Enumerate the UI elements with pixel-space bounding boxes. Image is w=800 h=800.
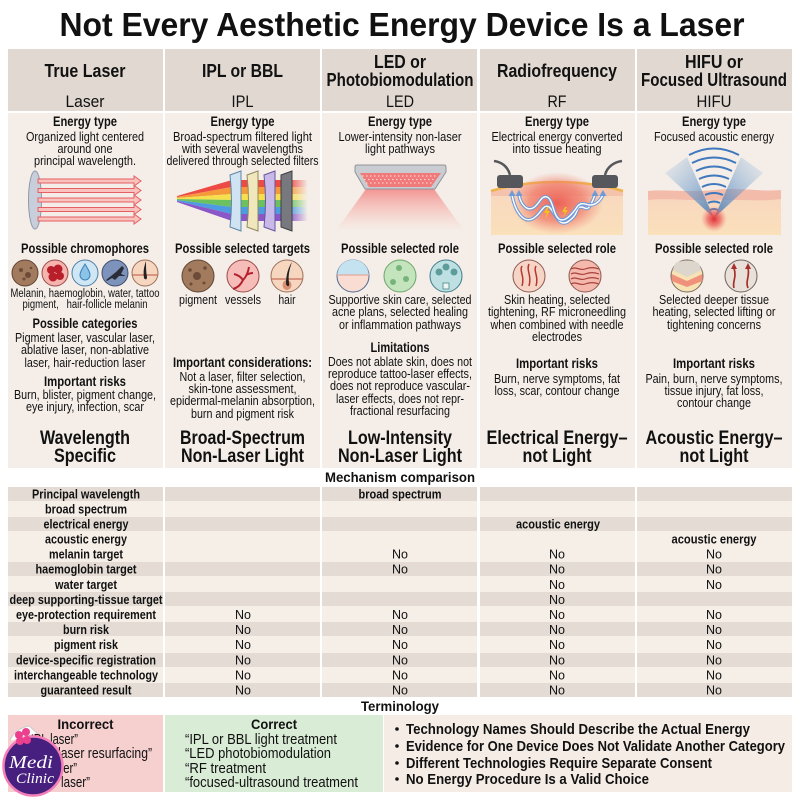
text: laser risks: eye injury, infection, scar [26,399,145,414]
footer: acoustic energy: not Light [680,446,749,467]
icon: water [72,260,98,286]
table row labels: water target [54,578,118,592]
table row labels: haemoglobin target [36,562,137,576]
panel: key messages [384,715,792,792]
text: possible categories: laser, hair-reduction laser [24,355,146,370]
text: HIFU risks [646,356,782,410]
text: HIFU role: Selected deeper tissue [659,292,769,307]
heading: terminology: Terminology [361,699,439,714]
text: HIFU energy type [654,114,774,144]
text: RF role: electrodes [532,329,582,344]
text: RF role: when combined with needle [490,317,624,332]
text: limitations [328,340,472,418]
heading: possible selected role (RF): Possible selected role [498,241,616,256]
text: HIFU risks: tissue injury, fat loss, [664,383,764,398]
text: laser energy type: principal wavelength. [34,153,136,168]
heading: possible chromophores: Possible chromophores [21,241,149,256]
table value cells: No [706,548,722,562]
header: LED or Photobiomodulation: LED or [374,52,426,72]
text: LED energy type [338,114,462,156]
text: IPL energy type: with several wavelengths [181,141,303,156]
table value cells: No [706,623,722,637]
text: RF energy type [492,114,622,156]
table value cells: No [549,638,565,652]
text: RF energy type: Electrical energy converted [492,129,622,144]
table row labels: melanin target [49,548,124,562]
header: IPL or BBL [165,49,320,111]
text: target labels: pigment [179,292,217,307]
text: HIFU role [652,292,776,332]
footer: broad-spectrum non-laser light [180,428,305,467]
text: LED energy type: Lower-intensity non-laser [338,129,462,144]
table value cells: acoustic energy [516,518,600,532]
text: laser risks: Burn, blister, pigment change, [14,387,156,402]
icon: melanin [12,260,38,286]
text: RF risks: loss, scar, contour change [494,383,620,398]
panel: incorrect terms [8,715,163,792]
panel: incorrect terms: “HIFU laser” [27,775,90,791]
icon: skin heating [513,260,545,292]
text: RF energy type: Energy type [525,114,589,129]
header: True Laser: True Laser [44,61,126,81]
table value cells: No [235,684,251,698]
illustration: filtered spectrum [177,171,308,231]
icon: acne [384,260,416,292]
table row labels: acoustic energy [45,532,127,546]
text: LED role: Supportive skin care, selected [328,292,472,307]
icon: lifting [725,260,757,292]
header: IPL or BBL: IPL [232,92,254,111]
text: IPL energy type [166,114,319,168]
text: HIFU risks: Important risks [673,356,755,371]
text: laser energy type: around one [58,141,112,156]
panel: correct terms: Correct [251,717,297,732]
icon: healing pathways [430,260,462,292]
table value cells: No [549,668,565,682]
table value cells: No [392,562,408,576]
table row labels: Principal wavelength [32,488,140,502]
text: RF role: tightening, RF microneedling [488,304,626,319]
text: important considerations: Not a laser, filter selection, [180,369,306,384]
table value cells: No [549,578,565,592]
table value cells [235,488,757,698]
panel: key messages: Technology Names Should Describe the Actual Energy [406,721,751,738]
table value cells: No [706,654,722,668]
panel: key messages: No Energy Procedure Is a Valid Choice [406,771,649,788]
logo: Medi Clinic badge: Medi [8,752,53,772]
panel: correct terms: “focused-ultrasound treatment [185,775,358,791]
logo: Medi Clinic badge: Clinic [16,771,54,787]
icon: vessels [227,260,259,292]
header: Radiofrequency: Radiofrequency [497,61,617,81]
text: chromophore list: pigment, hair-follicle melanin [22,299,148,311]
panel: HIFU column [637,49,792,468]
table value cells: No [235,623,251,637]
text: LED role: acne plans, selected healing [332,304,468,319]
icon: haemoglobin [42,260,68,286]
table value cells: No [706,578,722,592]
panel: correct terms: “LED photobiomodulation [185,746,331,762]
table row labels: eye-protection requirement [16,608,157,622]
panel: incorrect terms: “RF laser” [27,761,77,777]
footer: broad-spectrum non-laser light: Non-Laser Light [181,446,305,467]
footer: electrical energy: not Light [522,446,592,467]
heading: possible selected role (HIFU): Possible selected role [655,241,773,256]
panel: incorrect terms: Incorrect [58,717,114,732]
text: IPL energy type: delivered through selected filters [166,153,319,168]
text: LED energy type: Energy type [368,114,432,129]
text: RF energy type: into tissue heating [512,141,602,156]
text: RF risks: Important risks [516,356,598,371]
footer: low-intensity non-laser light: Non-Laser Light [338,446,463,467]
table value cells: No [392,608,408,622]
panel: LED column [322,49,477,468]
text: IPL energy type: Broad-spectrum filtered light [173,129,312,144]
text: limitations: laser effects, does not repr- [336,391,464,406]
table value cells: No [235,668,251,682]
header: Radiofrequency [480,49,635,111]
text: chromophore list [10,288,160,311]
header: HIFU or Focused Ultrasound: HIFU or [685,52,743,72]
text: HIFU energy type: Focused acoustic energy [654,129,774,144]
table row labels: guaranteed result [40,684,132,698]
table value cells: No [392,548,408,562]
footer: low-intensity non-laser light [338,428,463,467]
text: laser energy type [26,114,144,168]
text: IPL energy type: Energy type [210,114,275,129]
icon: hair [271,260,303,292]
text: possible categories: Possible categories [32,316,138,331]
text: important considerations [170,355,315,421]
table value cells: No [392,668,408,682]
text: RF role [488,292,626,344]
table value cells: broad spectrum [358,488,442,502]
table value cells: No [706,684,722,698]
footer: wavelength specific: Specific [54,446,116,467]
table value cells: No [392,623,408,637]
table row labels: device-specific registration [16,654,156,668]
text: possible categories [15,316,155,370]
footer: wavelength specific: Wavelength [40,428,130,449]
table value cells: No [706,562,722,576]
text: LED energy type: light pathways [365,141,435,156]
text: HIFU risks: contour change [677,395,751,410]
text: HIFU role: heating, selected lifting or [652,304,776,319]
panel: key messages: Different Technologies Require Separate Consent [406,755,712,772]
header: Radiofrequency: RF [548,92,566,111]
footer: low-intensity non-laser light: Low-Intensity [348,428,452,449]
table value cells: acoustic energy [672,532,757,546]
text: limitations: Does not ablate skin, does not [328,354,472,369]
table value cells: No [392,638,408,652]
panel: Radiofrequency column [480,49,635,468]
header: IPL or BBL: IPL or BBL [202,61,283,81]
table value cells: No [392,654,408,668]
footer: broad-spectrum non-laser light: Broad-Spectrum [180,428,305,449]
text: important considerations: burn and pigment risk [191,406,294,421]
text: laser energy type: Energy type [53,114,117,129]
text: RF role: Skin heating, selected [504,292,610,307]
table row labels: pigment risk [54,638,118,652]
text: HIFU energy type: Energy type [682,114,746,129]
table value cells: No [549,623,565,637]
table row labels: broad spectrum [45,502,127,516]
title: Not Every Aesthetic Energy Device Is a Laser [60,6,745,43]
header: LED or Photobiomodulation [322,49,477,111]
text: target labels: vessels [225,292,261,307]
table value cells: No [549,684,565,698]
text: HIFU role: tightening concerns [667,317,761,332]
text: limitations: Limitations [370,340,430,355]
text: laser energy type: Organized light centered [26,129,144,144]
footer: acoustic energy [646,428,782,467]
text: limitations: does not reproduce vascular- [330,378,470,393]
table row labels: deep supporting-tissue target [10,593,163,607]
icon: hair follicle [132,260,158,286]
panel: True Laser column [8,49,163,468]
illustration: RF electrodes heating tissue [491,161,623,235]
text: RF risks [494,356,620,398]
illustration: focused ultrasound [648,148,781,235]
text: chromophore list: Melanin, haemoglobin, water, tattoo [10,288,160,300]
illustration: laser beams [28,171,141,229]
table value cells: No [235,608,251,622]
heading: mechanism comparison: Mechanism comparison [325,470,475,485]
table value cells: No [392,684,408,698]
text: possible categories: ablative laser, non-ablative [21,342,149,357]
icon: pigment [182,260,214,292]
icons: chromophores [12,260,158,286]
table row labels [10,488,163,698]
footer: electrical energy: Electrical Energy– [486,428,628,449]
panel: incorrect terms: “LED laser resurfacing” [27,746,152,762]
text: laser risks: Important risks [44,374,126,389]
table: mechanism comparison [8,487,792,698]
table value cells: No [706,638,722,652]
text: LED role: or inflammation pathways [339,317,461,332]
text: important considerations: epidermal-melanin absorption, [170,393,315,408]
table value cells: No [549,548,565,562]
table row labels: interchangeable technology [14,668,158,682]
header: LED or Photobiomodulation: LED [386,92,414,111]
panel: correct terms [165,715,383,792]
text: target labels: hair [278,292,296,307]
text: limitations: reproduce tattoo-laser effects, [328,366,472,381]
table row labels: electrical energy [44,518,129,532]
heading: possible selected targets: Possible selected targets [175,241,310,256]
table value cells: No [706,608,722,622]
footer: wavelength specific [40,428,130,467]
panel: correct terms: “IPL or BBL light treatment [185,732,337,748]
header: True Laser [8,49,163,111]
text: important considerations: Important considerations: [173,355,312,370]
panel: IPL or BBL column [165,49,320,468]
table value cells: No [549,593,565,607]
text: important considerations: skin-tone assessment, [188,381,296,396]
header: HIFU or Focused Ultrasound [637,49,792,111]
header: LED or Photobiomodulation: Photobiomodulation [326,70,474,90]
panel: incorrect terms: “IPL laser” [27,732,78,748]
icon: skin care [337,260,369,292]
footer: electrical energy [486,428,628,467]
icon: tattoo pigment [102,260,128,286]
panel: correct terms: “RF treatment [185,761,266,777]
text: LED role [328,292,472,332]
illustration: LED panel [335,165,465,232]
icon: deeper tissue layers [671,260,703,292]
table value cells: No [706,668,722,682]
text: limitations: fractional resurfacing [350,403,450,418]
text: laser risks [14,374,156,414]
text: RF risks: Burn, nerve symptoms, fat [494,371,620,386]
text: possible categories: Pigment laser, vascular laser, [15,330,155,345]
table value cells: No [235,654,251,668]
table value cells: No [235,638,251,652]
header: HIFU or Focused Ultrasound: HIFU [696,92,732,111]
heading: possible selected role (LED): Possible selected role [341,241,459,256]
table row labels: burn risk [63,623,109,637]
header: True Laser: Laser [66,92,105,111]
table value cells: No [549,608,565,622]
table value cells: No [549,562,565,576]
table value cells: No [549,654,565,668]
logo: Medi Clinic badge [4,726,62,796]
text: target labels [179,292,296,307]
icon: tightening [569,260,601,292]
